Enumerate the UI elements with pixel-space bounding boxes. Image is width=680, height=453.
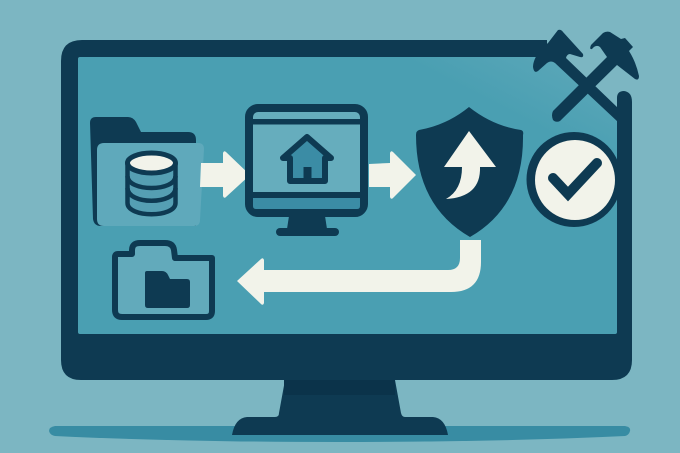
monitor frame: [61, 40, 632, 380]
arrow: computer to shield: [369, 151, 416, 199]
icon: house: [283, 137, 331, 183]
arrow: folder to computer: [200, 151, 250, 198]
monitor screen: [78, 57, 617, 334]
icon: folder with database: [90, 117, 204, 226]
icon: inner dark folder: [145, 271, 190, 308]
icon: check mark badge: [526, 132, 622, 227]
icon: shield with up arrow: [416, 107, 523, 237]
ground shadow: [49, 426, 630, 442]
icon: computer with house: [249, 108, 364, 236]
monitor stand: [232, 380, 448, 435]
icon: database stack: [128, 153, 176, 214]
icon: crossed hammers: [533, 30, 639, 122]
icon: restored folder: [115, 243, 212, 317]
arrow: shield back to folder: [237, 240, 481, 305]
